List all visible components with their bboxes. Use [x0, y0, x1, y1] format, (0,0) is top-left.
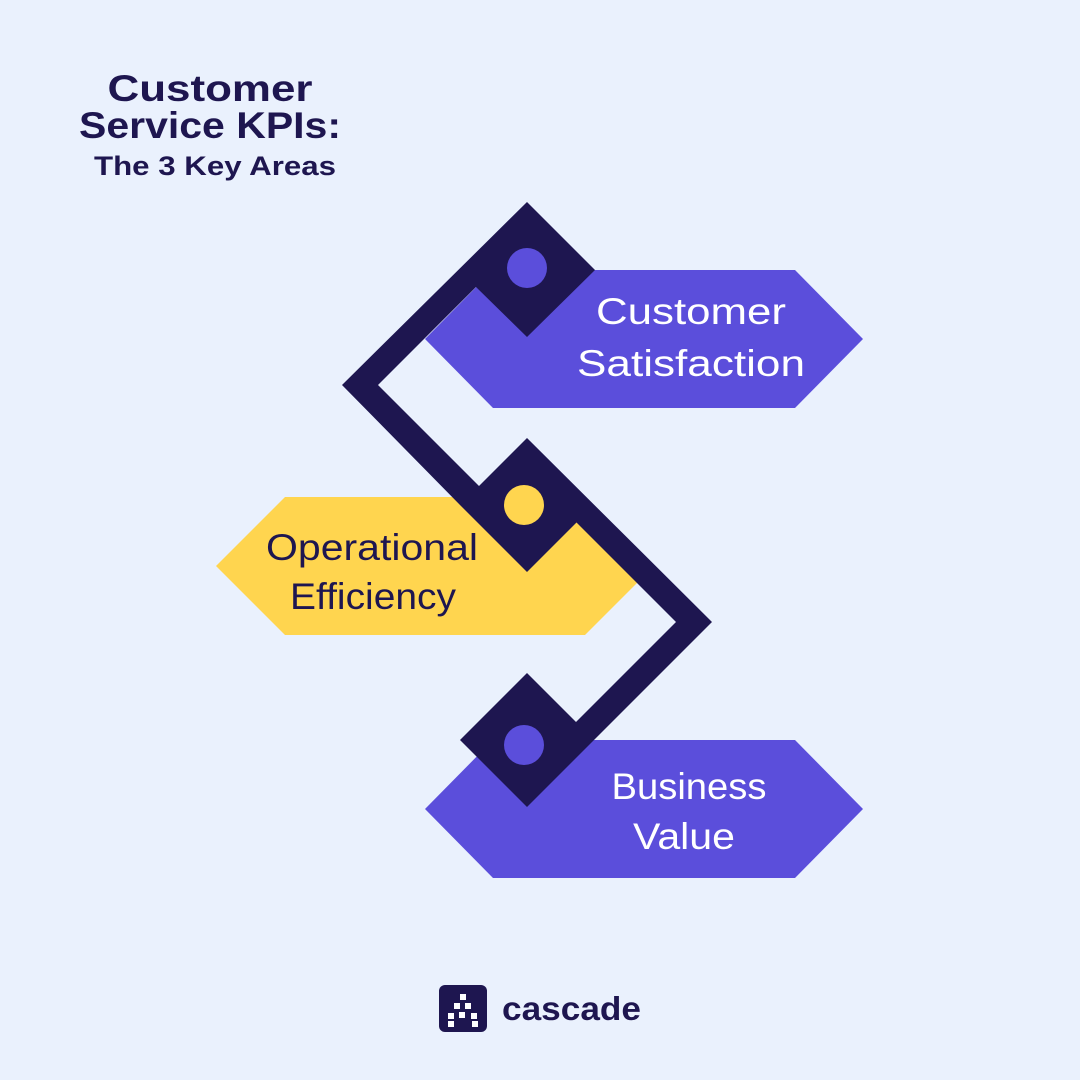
arrow: business value: Business — [612, 766, 766, 807]
arrow: operational efficiency — [216, 497, 654, 635]
title: Service KPIs: — [79, 105, 341, 146]
icon: dot 2 — [504, 485, 544, 525]
logo — [439, 985, 641, 1032]
title — [79, 68, 341, 181]
title: Customer — [108, 68, 312, 109]
arrow: business value: Value — [633, 816, 735, 857]
icon: dot 3 — [504, 725, 544, 765]
arrow: business value — [425, 740, 863, 878]
logo: cascade — [502, 990, 641, 1027]
title: The 3 Key Areas — [94, 151, 336, 181]
arrow: operational efficiency: Operational — [266, 527, 478, 568]
arrow: customer satisfaction: Customer — [596, 291, 786, 332]
arrow: operational efficiency: Efficiency — [290, 576, 457, 617]
zigzag connector with diamonds — [342, 202, 712, 807]
arrow: customer satisfaction: Satisfaction — [577, 343, 805, 384]
arrow: customer satisfaction — [425, 270, 863, 408]
icon: dot 1 — [507, 248, 547, 288]
